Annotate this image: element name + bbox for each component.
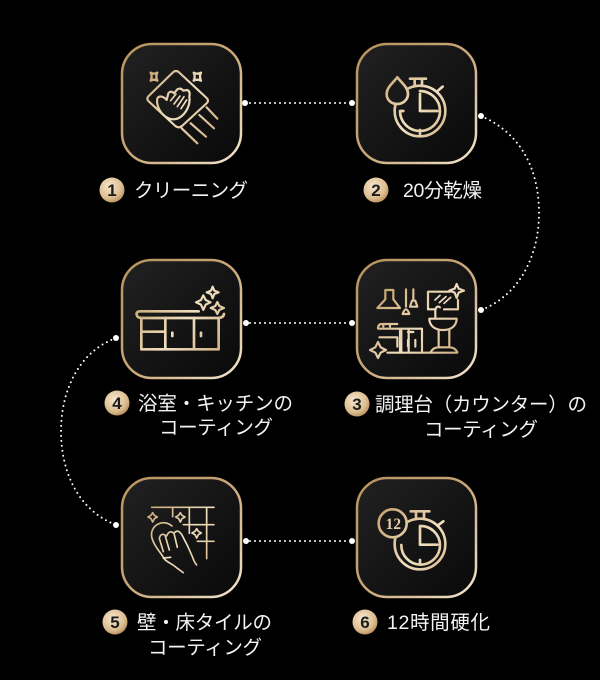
card: step 4 bath and kitchen bbox=[122, 260, 241, 378]
icon: kitchen and washbasin bbox=[370, 284, 464, 358]
icon: vanity cabinet with sparkles bbox=[137, 287, 224, 349]
card: step 6 twelve-hour curing bbox=[357, 478, 476, 597]
label: step 5 bbox=[102, 610, 272, 659]
label: step 4: 浴室・キッチンの bbox=[138, 393, 293, 415]
label: step 2: 20分乾燥 bbox=[403, 180, 482, 202]
label: step 3: コーティング bbox=[424, 419, 538, 441]
icon: hand wiping tiles bbox=[148, 507, 214, 573]
label: step 1: クリーニング bbox=[134, 180, 248, 202]
card: step 1 cleaning bbox=[122, 44, 241, 163]
icon: stopwatch with water drop bbox=[387, 77, 445, 136]
label: step 1: 1 bbox=[107, 181, 117, 200]
card: step 2 drying bbox=[357, 44, 476, 163]
label: step 3 bbox=[344, 392, 587, 441]
label: step 4: コーティング bbox=[159, 417, 273, 439]
label: step 4 bbox=[104, 390, 293, 439]
label: step 2: 2 bbox=[371, 181, 381, 200]
icon: hand wiping with cloth bbox=[147, 71, 217, 143]
connector: step 4 to 5 bbox=[61, 335, 119, 528]
connector: step 3 to 4 bbox=[243, 320, 355, 326]
label: step 5: コーティング bbox=[148, 637, 262, 659]
connector: step 5 to 6 bbox=[243, 538, 355, 544]
label: step 6: 12時間硬化 bbox=[387, 612, 490, 634]
label: step 2 bbox=[364, 178, 482, 202]
connector: step 2 to 3 bbox=[478, 113, 539, 313]
label: step 6 bbox=[352, 610, 490, 634]
icon: stopwatch with 12 badge: 12 bbox=[386, 516, 401, 533]
label: step 5: 5 bbox=[110, 613, 120, 632]
connector: step 1 to 2 bbox=[242, 100, 355, 106]
label: step 5: 壁・床タイルの bbox=[137, 612, 272, 634]
label: step 6: 6 bbox=[360, 613, 370, 632]
label: step 3: 調理台（カウンター）の bbox=[375, 394, 587, 416]
label: step 1 bbox=[100, 178, 248, 202]
card: step 3 kitchen counter bbox=[357, 260, 476, 378]
label: step 3: 3 bbox=[352, 395, 362, 414]
card: step 5 wall and floor tile bbox=[122, 478, 241, 597]
label: step 4: 4 bbox=[112, 394, 122, 413]
